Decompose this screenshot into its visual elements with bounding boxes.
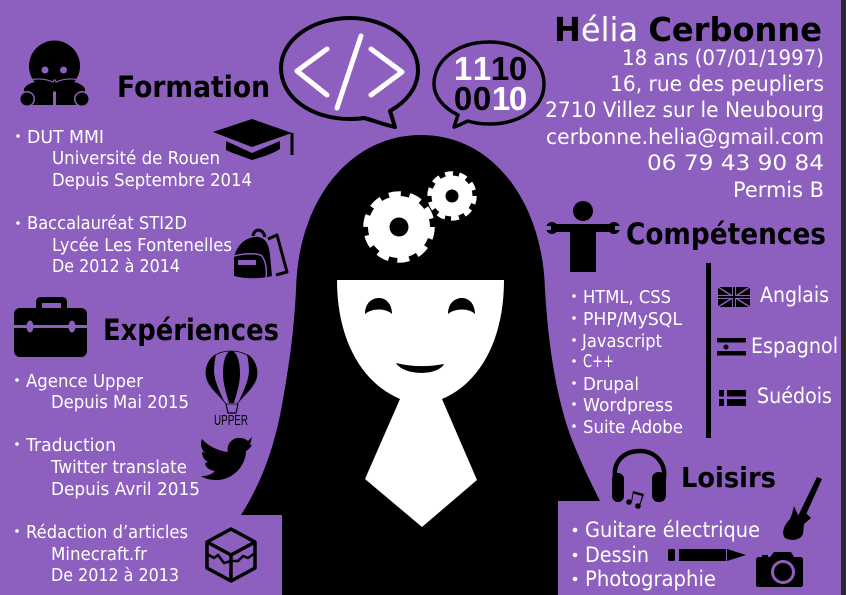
text: skills list: C++ — [583, 351, 614, 372]
text: Expériences entries: Minecraft.fr — [51, 544, 148, 565]
text: skills list: Javascript — [581, 331, 662, 352]
text: skills list: Wordpress — [583, 395, 673, 416]
header: contact details — [545, 46, 824, 202]
icon: binary speech bubble: 1110 — [454, 50, 527, 87]
header: contact details: 18 ans (07/01/1997) — [622, 46, 824, 70]
icon: briefcase — [14, 297, 87, 357]
silhouette: girl with long black hair — [241, 135, 600, 595]
icon: backpack — [234, 230, 287, 278]
left eye — [365, 298, 392, 314]
text: hobbies list — [573, 518, 760, 591]
text: hobbies list: Photographie — [585, 567, 716, 591]
icon: small gear — [430, 174, 474, 218]
heading: Expériences: Expériences — [103, 313, 279, 347]
text: Expériences entries: Traduction — [25, 435, 116, 456]
icon: person reading — [19, 40, 90, 107]
text: skills list: HTML, CSS — [583, 287, 671, 308]
icon: electric guitar — [783, 477, 822, 540]
header: contact details: 16, rue des peupliers — [610, 72, 824, 96]
heading: Loisirs: Loisirs — [681, 461, 776, 494]
text: skills list: Suite Adobe — [583, 417, 683, 438]
smile — [396, 363, 444, 373]
text: Formation entries: Lycée Les Fontenelles — [52, 235, 232, 256]
text: Formation entries: DUT MMI — [27, 127, 104, 148]
icon: binary speech bubble — [434, 42, 544, 127]
text: Formation entries: Université de Rouen — [52, 148, 220, 169]
icon: binary speech bubble: 0010 — [454, 80, 527, 117]
text: Formation entries: Baccalauréat STI2D — [27, 213, 187, 234]
heading: Compétences: Compétences — [626, 217, 826, 251]
header: contact details: cerbonne.helia@gmail.com — [546, 125, 824, 149]
text: Formation entries: De 2012 à 2014 — [52, 256, 180, 277]
icon: Spanish flag — [717, 338, 746, 356]
text: Expériences entries: Depuis Avril 2015 — [51, 479, 200, 500]
text: Formation entries: Depuis Septembre 2014 — [52, 170, 252, 191]
text: Expériences entries — [15, 371, 200, 586]
icon: hot air balloon Upper — [206, 351, 257, 429]
header: contact details: 06 79 43 90 84 — [647, 151, 824, 175]
icon: UK flag — [718, 287, 750, 307]
icon: minecraft block — [207, 529, 255, 581]
text: skills list — [572, 287, 683, 438]
icon: graduation cap — [213, 119, 294, 160]
heading: Formation: Formation — [117, 70, 270, 104]
icon: camera — [756, 552, 803, 587]
text: Anglais: Anglais — [760, 283, 829, 307]
text: hobbies list: Guitare électrique — [585, 518, 760, 542]
face and neck — [337, 280, 504, 527]
header: contact details: Permis B — [733, 178, 824, 202]
text: Expériences entries: Agence Upper — [26, 371, 144, 392]
text: Formation entries — [16, 127, 252, 277]
divider: skills and languages — [706, 263, 711, 438]
text: hobbies list: Dessin — [585, 543, 649, 567]
icon: code speech bubble — [281, 18, 418, 127]
icon: twitter bird — [201, 437, 252, 480]
icon: person with wrench arms — [545, 201, 621, 272]
text: Espagnol: Espagnol — [751, 334, 838, 358]
header: name: Hélia Cerbonne — [554, 10, 822, 49]
icon: hot air balloon Upper: UPPER — [214, 413, 248, 429]
text: Expériences entries: Depuis Mai 2015 — [51, 392, 189, 413]
text: Suédois: Suédois — [757, 384, 832, 408]
text: skills list: Drupal — [583, 374, 639, 395]
icon: large gear — [366, 194, 432, 260]
icon: headphones with music note — [612, 451, 666, 509]
header: contact details: 2710 Villez sur le Neubourg — [545, 98, 824, 122]
text: Expériences entries: De 2012 à 2013 — [51, 565, 179, 586]
right eye — [448, 298, 475, 314]
icon: Swedish flag — [719, 390, 746, 406]
text: skills list: PHP/MySQL — [583, 309, 682, 330]
text: Expériences entries: Twitter translate — [50, 457, 187, 478]
icon: pencil — [668, 549, 746, 561]
text: Expériences entries: Rédaction d’articles — [26, 522, 188, 543]
